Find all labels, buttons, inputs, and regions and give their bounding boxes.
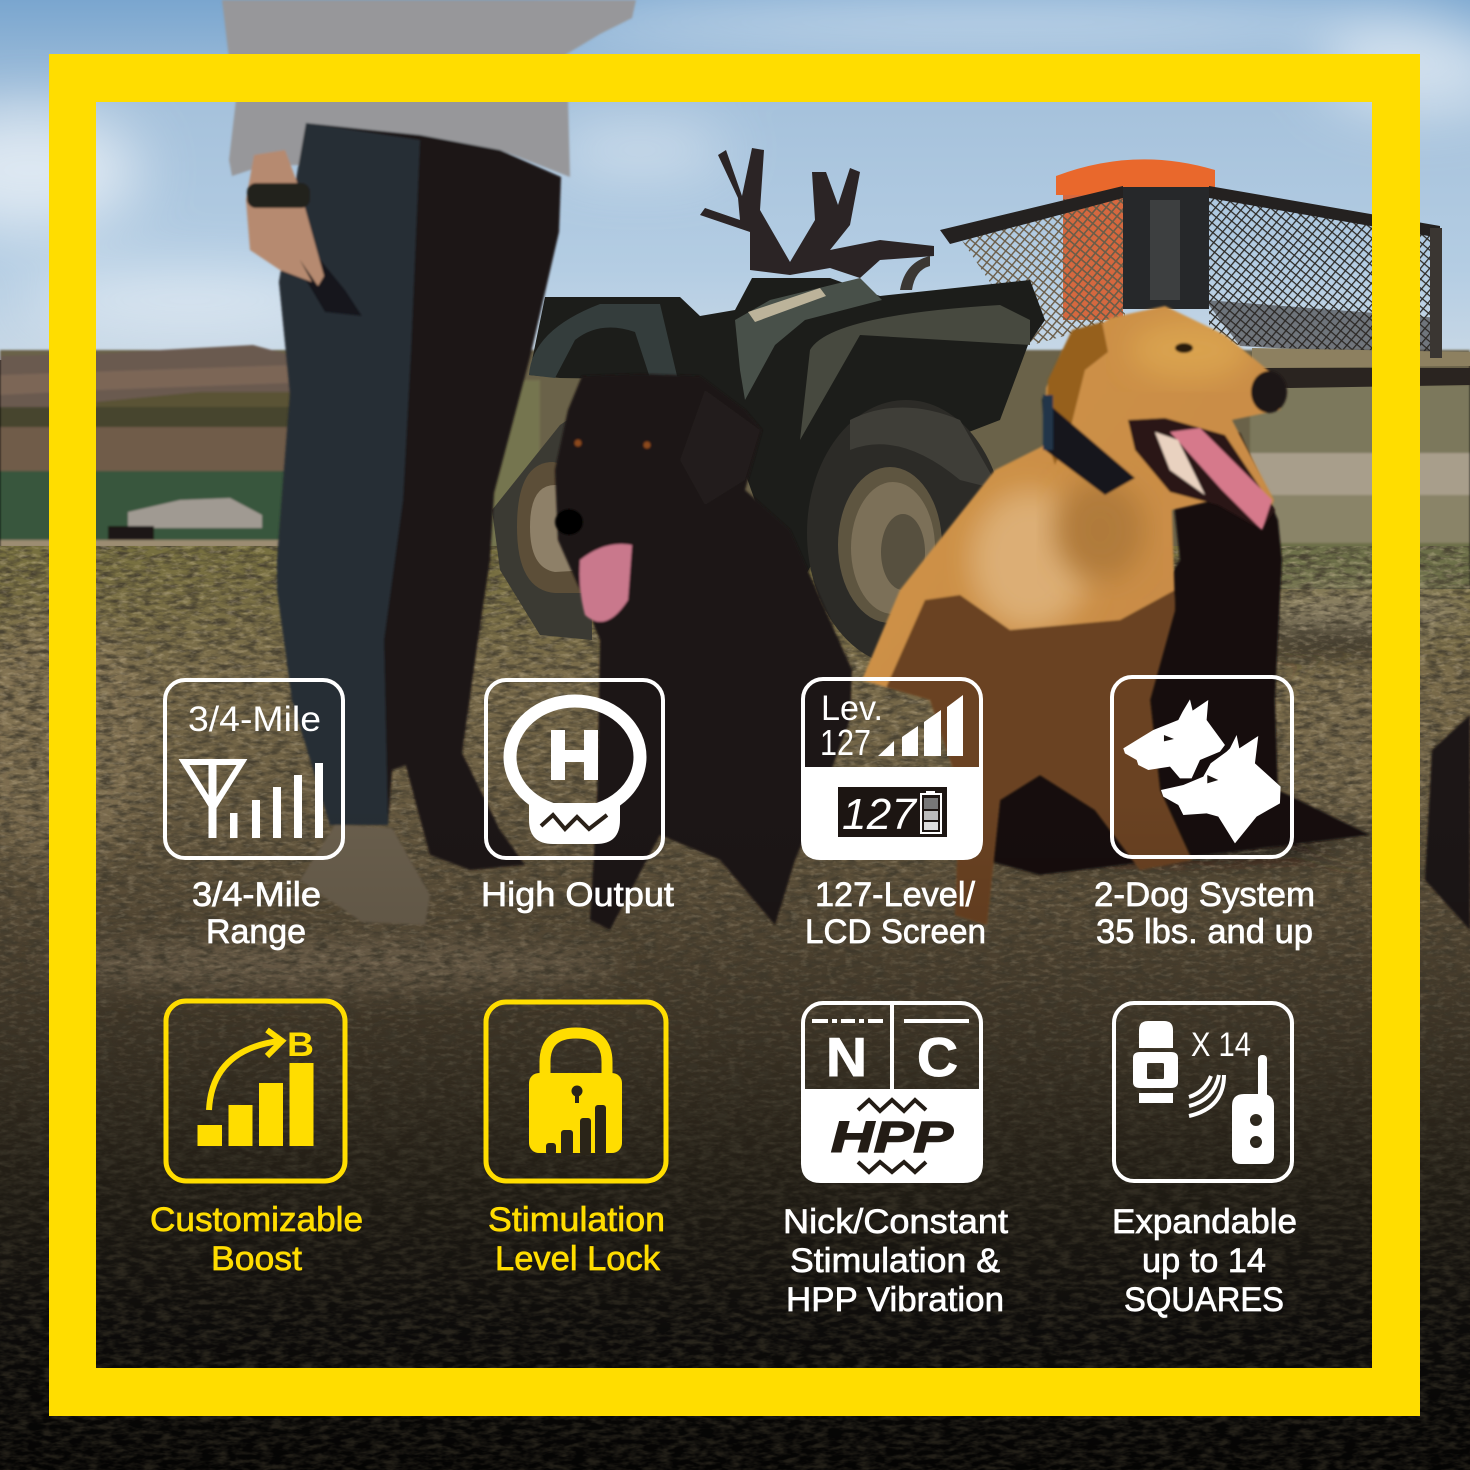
black dog bbox=[555, 374, 852, 930]
feature: 3/4-Mile Range bbox=[165, 680, 343, 951]
icon: N, C and HPP: N bbox=[826, 1026, 867, 1088]
icon: collar and remote x14 bbox=[1114, 1003, 1292, 1181]
far right dog shadow bbox=[1425, 715, 1470, 930]
feature: 127-Level LCD Screen bbox=[801, 679, 986, 951]
caption bbox=[150, 1201, 363, 1278]
caption bbox=[1094, 876, 1315, 951]
caption bbox=[192, 876, 321, 951]
icon: N, C and HPP: HPP bbox=[831, 1113, 954, 1162]
feature: Nick/Constant Stimulation & HPP Vibration bbox=[783, 1003, 1009, 1319]
caption: Stimulation & bbox=[790, 1242, 1000, 1280]
feature: Customizable Boost bbox=[150, 1001, 363, 1278]
icon: two dog heads bbox=[1112, 677, 1292, 857]
caption: Stimulation bbox=[488, 1201, 665, 1239]
rear black dog and shadow under the dogs bbox=[985, 433, 1370, 875]
feature: Stimulation Level Lock bbox=[486, 1002, 666, 1278]
icon: level display: Lev. bbox=[821, 689, 883, 728]
caption: Range bbox=[206, 913, 306, 951]
feature: High Output bbox=[481, 680, 675, 914]
icon: boost bars with arrow: B bbox=[287, 1026, 314, 1064]
darkening gradient bbox=[0, 800, 1470, 1470]
caption bbox=[1112, 1203, 1297, 1319]
icon: boost bars with arrow bbox=[166, 1001, 345, 1181]
icon: padlock with level bars bbox=[486, 1002, 666, 1181]
feature: Expandable up to 14 SQUARES bbox=[1112, 1003, 1297, 1319]
caption: High Output bbox=[481, 876, 675, 914]
feature: 2-Dog System bbox=[1094, 677, 1315, 951]
icon: level display: 127 bbox=[842, 790, 918, 839]
caption: up to 14 bbox=[1142, 1242, 1266, 1280]
icon: antenna and signal bars: 3/4-Mile bbox=[188, 700, 321, 739]
caption: 127-Level/ bbox=[815, 876, 976, 914]
caption: Nick/Constant bbox=[783, 1203, 1009, 1241]
caption bbox=[488, 1201, 665, 1278]
caption: 2-Dog System bbox=[1094, 876, 1315, 914]
icon: N, C and HPP bbox=[801, 1003, 983, 1183]
grassy ground bbox=[0, 546, 1470, 1470]
handler: shirt, hand and jeans bbox=[222, 0, 636, 925]
sky bbox=[0, 0, 1470, 360]
icon: collar receiver with H bbox=[486, 680, 663, 858]
icon: antenna and signal bars bbox=[165, 680, 343, 858]
ATV: handlebars, body and wheels bbox=[492, 148, 1045, 666]
caption: 3/4-Mile bbox=[192, 876, 321, 914]
trailer with mesh, post and orange bucket bbox=[940, 159, 1470, 388]
golden dog bbox=[850, 300, 1300, 940]
icon: N, C and HPP: C bbox=[917, 1026, 958, 1088]
distant hills and fields bbox=[0, 345, 1470, 589]
caption: Expandable bbox=[1112, 1203, 1297, 1241]
caption: 35 lbs. and up bbox=[1096, 913, 1313, 951]
caption: Level Lock bbox=[495, 1240, 661, 1278]
caption: LCD Screen bbox=[805, 913, 986, 951]
caption: SQUARES bbox=[1124, 1281, 1284, 1319]
caption: Boost bbox=[211, 1240, 303, 1278]
caption bbox=[805, 876, 986, 951]
caption: HPP Vibration bbox=[786, 1281, 1004, 1319]
caption: Customizable bbox=[150, 1201, 363, 1239]
caption bbox=[783, 1203, 1009, 1319]
icon: collar and remote x14: X 14 bbox=[1191, 1026, 1251, 1064]
icon: level display: 127 bbox=[820, 722, 871, 763]
icon: level display bbox=[801, 679, 983, 860]
